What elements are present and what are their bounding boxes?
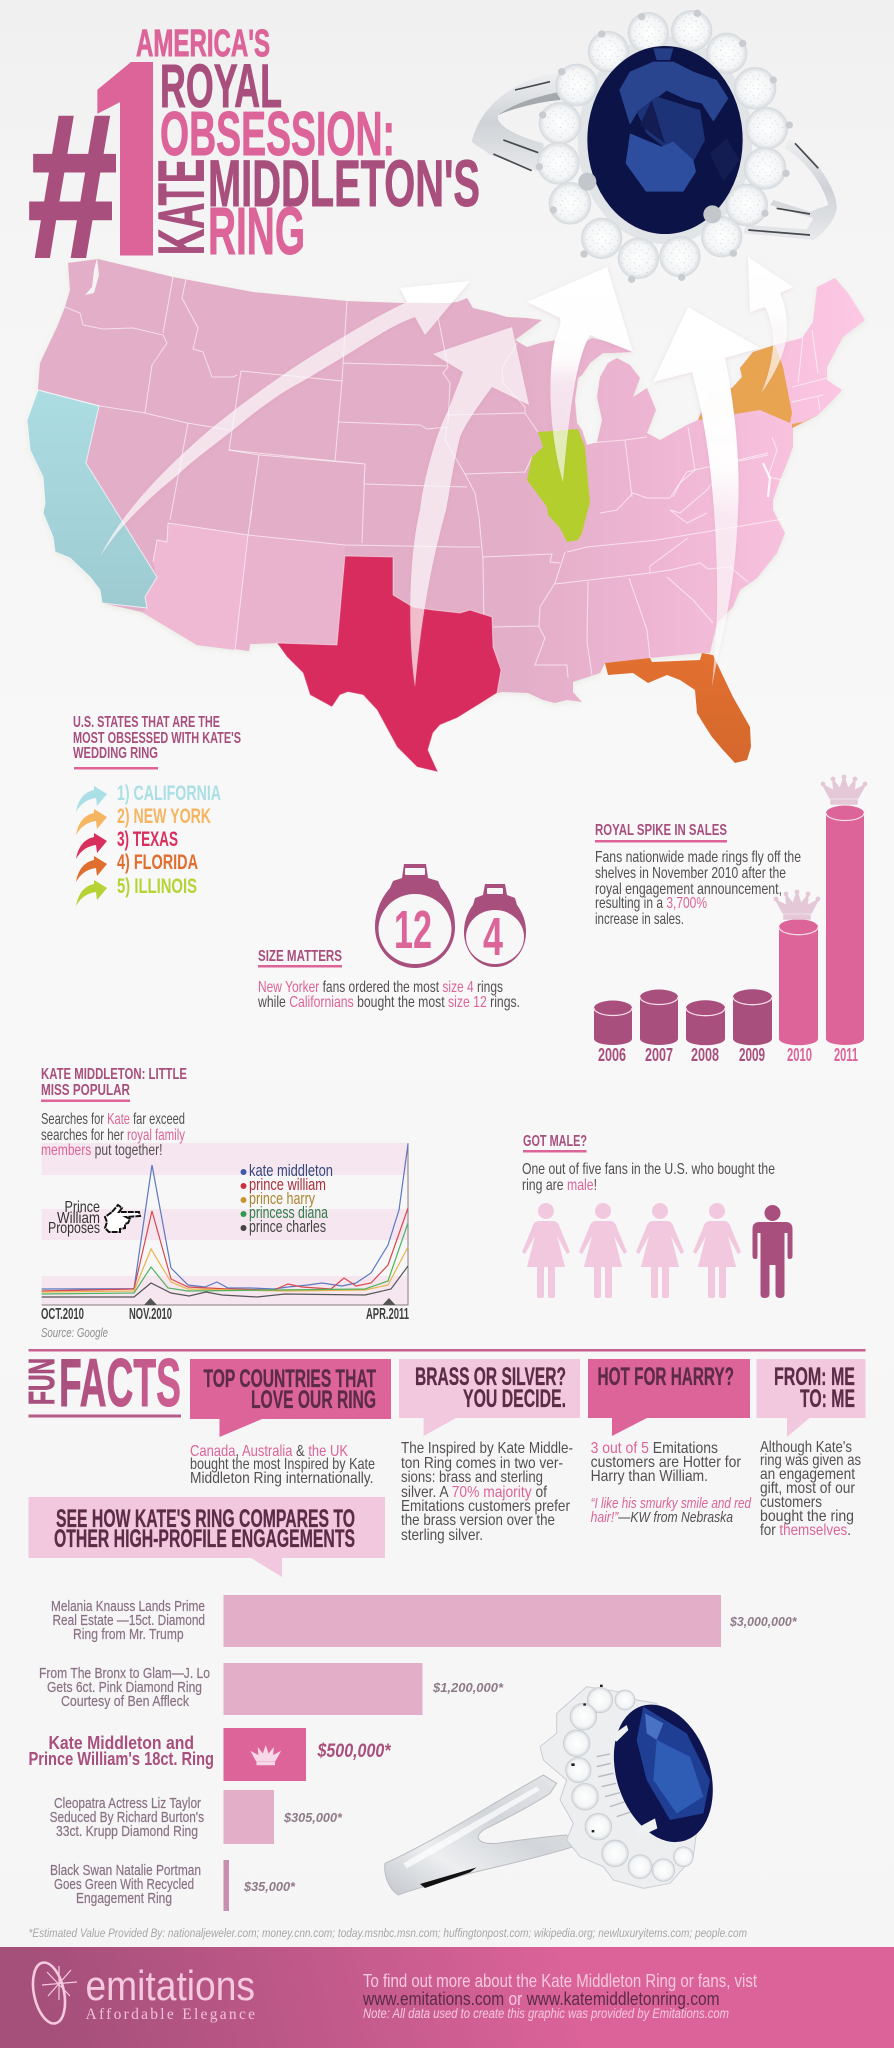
callout: Prince William proposes: Proposes bbox=[48, 1220, 100, 1237]
text: hot for harry: “I like his smurky smile and red bbox=[591, 1495, 752, 1512]
panel: little miss popular bbox=[41, 1066, 409, 1340]
text: brass or silver bbox=[401, 1440, 573, 1544]
sapphire bbox=[587, 46, 743, 234]
title: America's #1 Royal Obsession: Kate Middleton's Ring: 1 bbox=[96, 7, 171, 314]
legend heading: WEDDING RING bbox=[73, 745, 158, 762]
legend heading: MOST OBSESSED WITH KATE'S bbox=[73, 730, 241, 747]
text: brass or silver: silver. A 70% majority of bbox=[401, 1484, 547, 1501]
state: New York bbox=[698, 345, 818, 428]
icon: sapphire ring, side view bbox=[385, 1685, 730, 1895]
bar chart: yearly sales cylinders: 2006 bbox=[598, 1045, 626, 1065]
bar: Melania Knauss: $3,000,000* bbox=[729, 1614, 797, 1629]
footer background bbox=[0, 1947, 894, 2048]
callout: Prince William proposes: Prince bbox=[64, 1199, 100, 1216]
logo: emitations: emitations bbox=[86, 1962, 255, 2009]
bar: Kate Middleton bbox=[28, 1728, 392, 1781]
bar chart: yearly sales cylinders: 2008 bbox=[691, 1045, 719, 1065]
legend item: California: 1) CALIFORNIA bbox=[117, 782, 221, 805]
callout box: hot for harry: HOT FOR HARRY? bbox=[598, 1363, 734, 1391]
text: hot for harry: hair!”—KW from Nebraska bbox=[591, 1509, 733, 1526]
source note: Source: Google bbox=[41, 1326, 108, 1340]
callout box: see how Kate's ring compares: SEE HOW KATE'S RING COMPARES TO bbox=[56, 1505, 355, 1533]
chart axis labels: APR.2011 bbox=[366, 1306, 409, 1323]
title: America's #1 Royal Obsession: Kate Middleton's Ring bbox=[29, 29, 479, 258]
bar chart: yearly sales cylinders: 2007 bbox=[645, 1045, 673, 1065]
legend item: Illinois: 5) ILLINOIS bbox=[117, 875, 197, 898]
icon: crown in Kate bar bbox=[252, 1747, 280, 1765]
chart legend bbox=[240, 1161, 333, 1236]
legend heading bbox=[73, 714, 241, 770]
text: from me to me bbox=[760, 1439, 861, 1539]
callout box: see how Kate's ring compares bbox=[28, 1497, 385, 1577]
heading: got male bbox=[523, 1133, 587, 1152]
panel: size matters bbox=[257, 864, 526, 1011]
text: top countries bbox=[190, 1443, 375, 1487]
map: base outline of the states bbox=[27, 259, 865, 705]
text: from me to me: an engagement bbox=[760, 1466, 855, 1483]
text: got male bbox=[522, 1161, 775, 1194]
footnote: sources: *Estimated Value Provided By: nationaljeweler.com; money.cnn.com; today.msnbc.msn.com; huffingtonpost.com; wikipedia.org; newluxuryitems.com; people.com bbox=[28, 1928, 747, 1940]
heading: royal spike in sales bbox=[595, 822, 727, 842]
text: got male: One out of five fans in the U.S. who bought the bbox=[522, 1161, 775, 1178]
arrow: New York bbox=[748, 257, 793, 393]
bar: Kate Middleton: $500,000* bbox=[317, 1741, 392, 1762]
halo bbox=[540, 1685, 703, 1888]
US map bbox=[27, 258, 865, 772]
sapphire bbox=[597, 1692, 730, 1855]
text: size matters bbox=[257, 979, 520, 1011]
text: brass or silver: ton Ring comes in two ver- bbox=[401, 1455, 563, 1472]
bar chart: yearly sales cylinders: 2011 bbox=[834, 1045, 858, 1065]
bar: Natalie Portman bbox=[50, 1860, 296, 1911]
text: hot for harry bbox=[591, 1440, 752, 1526]
bar: J. Lo: From The Bronx to Glam—J. Lo bbox=[39, 1665, 210, 1682]
footer text: To find out more about the Kate Middleton Ring or fans, vist bbox=[363, 1971, 757, 1991]
icon: size 4 ring: 4 bbox=[483, 907, 503, 967]
text: top countries: Canada, Australia & the UK bbox=[190, 1443, 348, 1460]
legend item: Illinois bbox=[76, 875, 197, 906]
text: searches bbox=[41, 1111, 185, 1159]
text: top countries: bought the most Inspired by Kate bbox=[190, 1456, 375, 1473]
icon: crown above 2011 bar bbox=[821, 775, 867, 804]
axis markers bbox=[144, 1298, 396, 1305]
ring shank bbox=[385, 1775, 573, 1895]
heading: fun facts: FUN bbox=[21, 1358, 62, 1405]
bar: Liz Taylor bbox=[50, 1790, 343, 1844]
bar: Natalie Portman: $35,000* bbox=[243, 1879, 296, 1894]
map: state borders bbox=[38, 277, 827, 678]
prongs bbox=[536, 10, 793, 283]
legend item: Texas: 3) TEXAS bbox=[117, 828, 178, 851]
text: from me to me: for themselves. bbox=[760, 1522, 851, 1539]
bar: Liz Taylor: Seduced By Richard Burton's bbox=[50, 1809, 204, 1826]
text: sales: Fans nationwide made rings fly off the bbox=[595, 849, 801, 866]
text: from me to me: Although Kate's bbox=[760, 1439, 852, 1456]
legend item: Texas bbox=[76, 828, 178, 859]
chart legend: prince william bbox=[249, 1175, 326, 1194]
legend: states most obsessed bbox=[73, 714, 241, 906]
callout box: brass or silver: BRASS OR SILVER? bbox=[415, 1363, 566, 1391]
title: America's #1 Royal Obsession: Kate Middleton's Ring: MIDDLETON'S bbox=[208, 146, 480, 220]
arrows rising from the top states to the ring bbox=[100, 257, 793, 687]
text: sales: royal engagement announcement, bbox=[595, 881, 782, 898]
callout: Prince William proposes bbox=[48, 1199, 140, 1237]
title: America's #1 Royal Obsession: Kate Middleton's Ring: # bbox=[28, 73, 117, 300]
logo: emitations bbox=[28, 1960, 255, 2026]
state: Texas bbox=[277, 556, 501, 772]
icon: sapphire ring, front view bbox=[472, 10, 837, 283]
text: size matters: while Californians bought the most size 12 rings. bbox=[257, 994, 520, 1011]
icon: size 12 ring: 12 bbox=[394, 900, 432, 960]
legend item: New York: 2) NEW YORK bbox=[117, 805, 211, 828]
bar: J. Lo: Gets 6ct. Pink Diamond Ring bbox=[47, 1679, 202, 1696]
text: searches: Searches for Kate far exceed bbox=[41, 1111, 185, 1128]
text: searches: members put together! bbox=[41, 1142, 162, 1159]
arrow: Florida bbox=[653, 307, 760, 687]
bar: Liz Taylor: $305,000* bbox=[283, 1810, 343, 1825]
title: America's #1 Royal Obsession: Kate Middleton's Ring: RING bbox=[208, 194, 305, 269]
text: got male: ring are male! bbox=[522, 1177, 597, 1194]
state: Florida bbox=[605, 653, 751, 763]
bar: Natalie Portman: Black Swan Natalie Portman bbox=[50, 1862, 201, 1879]
text: brass or silver: Emitations customers prefer bbox=[401, 1498, 571, 1515]
ring band bbox=[472, 72, 837, 240]
text: size matters: New Yorker fans ordered the most size 4 rings bbox=[258, 979, 503, 996]
legend item: Florida: 4) FLORIDA bbox=[117, 851, 198, 874]
callout box: top countries: LOVE OUR RING bbox=[251, 1386, 376, 1414]
text: brass or silver: The Inspired by Kate Middle- bbox=[401, 1440, 573, 1457]
bar: Liz Taylor: 33ct. Krupp Diamond Ring bbox=[56, 1823, 198, 1840]
text: from me to me: customers bbox=[760, 1494, 822, 1511]
text: from me to me: gift, most of our bbox=[760, 1480, 856, 1497]
heading: fun facts bbox=[21, 1345, 181, 1421]
callout box: see how Kate's ring compares: OTHER HIGH-PROFILE ENGAGEMENTS bbox=[54, 1525, 355, 1553]
heading: little miss popular: MISS POPULAR bbox=[41, 1082, 130, 1099]
bar chart: yearly sales cylinders: 2010 bbox=[787, 1045, 812, 1065]
text: sales: resulting in a 3,700% bbox=[595, 895, 707, 912]
chart legend: kate middleton bbox=[249, 1161, 333, 1180]
bar: J. Lo bbox=[39, 1663, 504, 1715]
bar: Liz Taylor: Cleopatra Actress Liz Taylor bbox=[54, 1795, 201, 1812]
callout box: hot for harry bbox=[588, 1359, 750, 1436]
footer bbox=[0, 1947, 894, 2048]
callout box: top countries: TOP COUNTRIES THAT bbox=[204, 1365, 376, 1393]
bar: Melania Knauss bbox=[51, 1595, 797, 1647]
arrow: Texas bbox=[410, 327, 529, 687]
text: hot for harry: Harry than William. bbox=[591, 1468, 708, 1485]
legend item: New York bbox=[76, 805, 211, 835]
text: sales: shelves in November 2010 after the bbox=[595, 865, 786, 882]
panel: got male bbox=[522, 1133, 792, 1298]
bar: Natalie Portman: Engagement Ring bbox=[76, 1890, 172, 1907]
diamonds bbox=[537, 10, 788, 279]
callout box: brass or silver: YOU DECIDE. bbox=[463, 1385, 566, 1413]
chart legend: prince charles bbox=[249, 1217, 326, 1236]
heading: got male: GOT MALE? bbox=[523, 1133, 587, 1150]
heading: little miss popular: KATE MIDDLETON: LITTLE bbox=[41, 1066, 187, 1083]
bar: Kate Middleton: Prince William's 18ct. Ring bbox=[28, 1749, 214, 1769]
bar: Natalie Portman: Goes Green With Recycled bbox=[54, 1876, 194, 1893]
text: brass or silver: the brass version over the bbox=[401, 1512, 555, 1529]
callout box: top countries bbox=[190, 1359, 391, 1437]
icon: crown above 2010 bar bbox=[774, 890, 820, 919]
logo: emitations: Affordable Elegance bbox=[86, 2006, 255, 2023]
text: hot for harry: customers are Hotter for bbox=[591, 1454, 742, 1471]
legend heading: U.S. STATES THAT ARE THE bbox=[73, 714, 220, 731]
arrow: California head top bbox=[400, 281, 470, 303]
legend item: California bbox=[76, 782, 221, 812]
legend item: Florida bbox=[76, 851, 198, 882]
heading: fun facts: FACTS bbox=[59, 1345, 181, 1421]
title: America's #1 Royal Obsession: Kate Middleton's Ring: AMERICA'S bbox=[136, 23, 270, 65]
heading: royal spike in sales: ROYAL SPIKE IN SALES bbox=[595, 822, 727, 839]
arrow: Illinois bbox=[527, 267, 633, 482]
bar chart: yearly sales cylinders: 2009 bbox=[739, 1045, 765, 1065]
panel: royal spike in sales bbox=[594, 775, 867, 1065]
panel: fun facts bbox=[21, 1345, 866, 1544]
bar: Melania Knauss: Real Estate —15ct. Diamond bbox=[52, 1612, 205, 1629]
chart legend: princess diana bbox=[249, 1203, 328, 1222]
text: hot for harry: 3 out of 5 Emitations bbox=[591, 1440, 718, 1457]
callout box: from me to me: TO: ME bbox=[800, 1385, 855, 1413]
icon: size 4 ring bbox=[464, 884, 526, 967]
state: California bbox=[27, 390, 157, 608]
chart axis labels bbox=[41, 1306, 409, 1323]
text: brass or silver: sterling silver. bbox=[401, 1527, 483, 1544]
text: sales bbox=[595, 849, 801, 928]
bar chart: engagement ring values bbox=[28, 1595, 797, 1911]
footer text: Note: All data used to create this graphic was provided by Emitations.com bbox=[363, 2006, 729, 2021]
chart axis labels: NOV.2010 bbox=[129, 1306, 172, 1323]
title: America's #1 Royal Obsession: Kate Middleton's Ring: KATE bbox=[144, 159, 218, 255]
footer text bbox=[362, 1971, 757, 2021]
text: top countries: Middleton Ring internationally. bbox=[190, 1470, 374, 1487]
title: America's #1 Royal Obsession: Kate Middleton's Ring: OBSESSION: bbox=[160, 100, 395, 169]
pictogram: four women and one man bbox=[522, 1203, 792, 1298]
bar: J. Lo: $1,200,000* bbox=[432, 1680, 504, 1695]
text: brass or silver: sions: brass and sterling bbox=[401, 1469, 543, 1486]
callout box: brass or silver bbox=[399, 1359, 580, 1436]
callout box: from me to me bbox=[756, 1359, 866, 1437]
footer text: www.emitations.com or www.katemiddletonring.com bbox=[362, 1989, 720, 2009]
text: sales: increase in sales. bbox=[595, 911, 684, 928]
chart axis labels: OCT.2010 bbox=[41, 1306, 84, 1323]
text: from me to me: ring was given as bbox=[760, 1452, 861, 1469]
bar: Melania Knauss: Ring from Mr. Trump bbox=[73, 1626, 184, 1643]
bar chart: yearly sales cylinders bbox=[594, 806, 864, 1065]
icon: size 12 ring bbox=[375, 864, 455, 968]
heading: size matters: SIZE MATTERS bbox=[258, 948, 342, 965]
state: Illinois bbox=[527, 429, 590, 542]
chart legend: prince harry bbox=[249, 1189, 315, 1208]
bar: Melania Knauss: Melania Knauss Lands Prime bbox=[51, 1598, 205, 1615]
text: searches: searches for her royal family bbox=[41, 1127, 185, 1144]
callout: Prince William proposes: William bbox=[57, 1210, 100, 1227]
arrow: California bbox=[100, 281, 470, 557]
heading: size matters bbox=[258, 948, 342, 968]
title: America's #1 Royal Obsession: Kate Middleton's Ring: ROYAL bbox=[160, 52, 282, 120]
line chart: search trends bbox=[41, 1111, 409, 1323]
text: from me to me: bought the ring bbox=[760, 1508, 854, 1525]
bar: J. Lo: Courtesy of Ben Affleck bbox=[61, 1693, 189, 1710]
heading: little miss popular bbox=[41, 1066, 187, 1102]
bar: Kate Middleton: Kate Middleton and bbox=[48, 1733, 194, 1753]
